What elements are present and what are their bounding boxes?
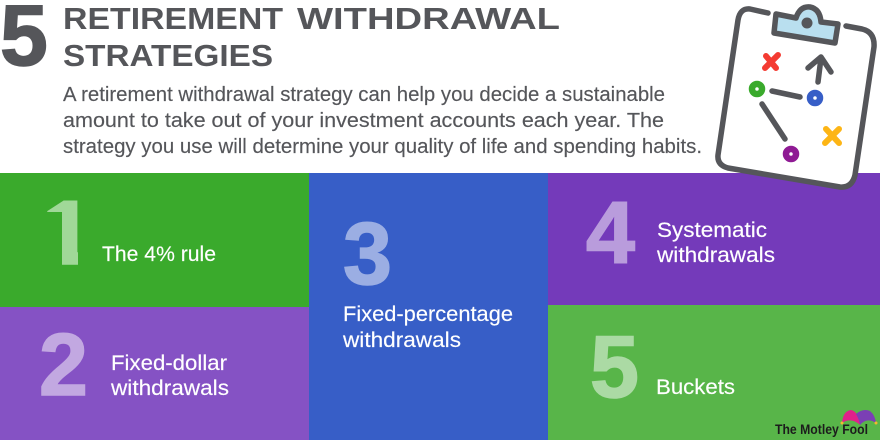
panel: 3 Fixed-percentage withdrawals: Fixed-percentage bbox=[343, 303, 513, 326]
panel: 5 Buckets: 5 bbox=[590, 317, 639, 416]
panel: 5 Buckets bbox=[548, 305, 880, 440]
panel: 4 Systematic withdrawals: 4 bbox=[586, 183, 635, 282]
panel: 2 Fixed-dollar withdrawals bbox=[0, 307, 309, 440]
panel: 3 Fixed-percentage withdrawals: 3 bbox=[343, 204, 392, 303]
panel: 5 Buckets: Buckets bbox=[656, 376, 735, 399]
panel: 2 Fixed-dollar withdrawals: 2 bbox=[39, 315, 88, 414]
panel: 1 The 4% rule: The 4% rule bbox=[102, 243, 216, 266]
logo: The Motley Fool bbox=[775, 410, 878, 437]
intro paragraph: A retirement withdrawal strategy can help you decide a sustainable bbox=[63, 83, 665, 106]
panel: 4 Systematic withdrawals: Systematic bbox=[657, 219, 767, 242]
panel: 1 The 4% rule bbox=[0, 173, 309, 307]
intro paragraph: amount to take out of your investment accounts each year. The bbox=[63, 109, 664, 132]
title: WITHDRAWAL bbox=[297, 1, 560, 36]
title bbox=[63, 1, 560, 73]
panel: 1 The 4% rule: 1 bbox=[43, 183, 92, 282]
logo: The Motley Fool: The Motley Fool bbox=[775, 422, 868, 437]
intro paragraph bbox=[63, 83, 702, 158]
title: STRATEGIES bbox=[63, 38, 273, 73]
title: RETIREMENT bbox=[63, 1, 283, 36]
panel: 2 Fixed-dollar withdrawals: Fixed-dollar bbox=[111, 352, 227, 375]
intro paragraph: strategy you use will determine your quality of life and spending habits. bbox=[63, 135, 702, 158]
panel: 3 Fixed-percentage withdrawals: withdrawals bbox=[342, 329, 461, 352]
icon: clipboard bbox=[718, 7, 874, 187]
panel: 2 Fixed-dollar withdrawals: withdrawals bbox=[110, 377, 229, 400]
panel: 3 Fixed-percentage withdrawals bbox=[309, 173, 548, 440]
panel: 4 Systematic withdrawals: withdrawals bbox=[656, 244, 775, 267]
panel: 4 Systematic withdrawals bbox=[548, 173, 880, 305]
